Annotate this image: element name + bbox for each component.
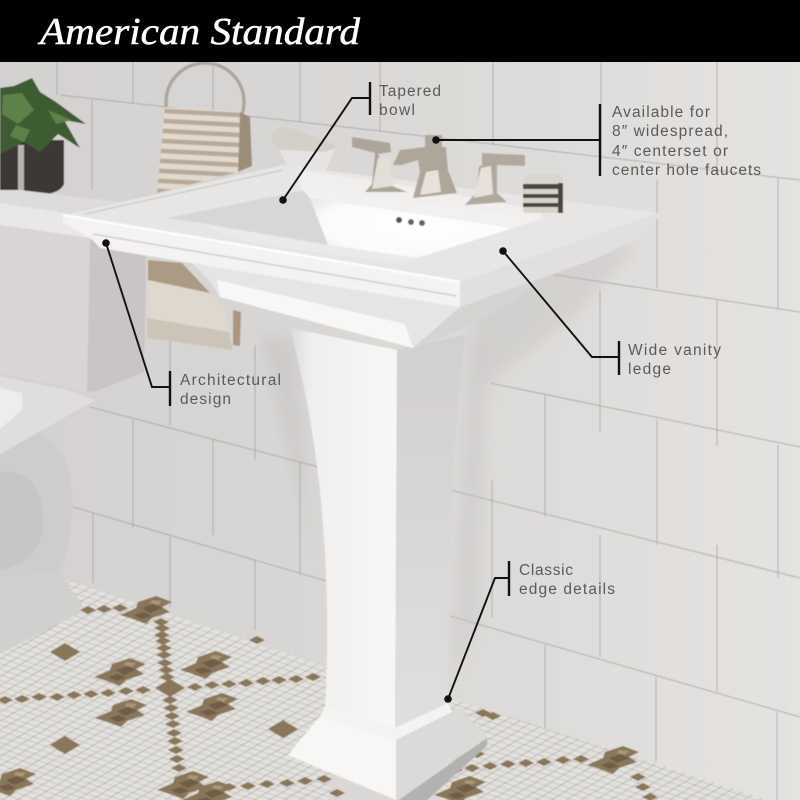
callout: faucet options: 8″ widespread, bbox=[612, 123, 728, 140]
icon: soap dish bbox=[270, 128, 336, 170]
header bar bbox=[0, 0, 800, 62]
wall shadow under sink bbox=[478, 249, 624, 374]
basin bbox=[167, 187, 543, 263]
callout: wide vanity ledge bbox=[499, 247, 721, 378]
callout: faucet options: 4″ centerset or bbox=[612, 143, 728, 160]
icon: faucet bbox=[352, 135, 525, 205]
pedestal base bbox=[288, 703, 487, 800]
callout: wide vanity ledge: ledge bbox=[628, 361, 671, 378]
sink top bbox=[63, 165, 658, 282]
callout: classic edge details: edge details bbox=[519, 581, 615, 598]
icon: potted plant bbox=[0, 78, 86, 196]
callout: faucet options: center hole faucets bbox=[612, 162, 761, 179]
icon: towel ring bbox=[164, 62, 246, 114]
toilet bowl bbox=[0, 430, 82, 656]
sink apron bbox=[185, 258, 460, 348]
callout: faucet options bbox=[432, 104, 761, 179]
icon: jar bbox=[523, 174, 563, 213]
callout: faucet options: Available for bbox=[612, 104, 710, 121]
floor mosaic bbox=[0, 580, 775, 800]
pedestal column bbox=[290, 328, 465, 730]
toilet tank bbox=[87, 238, 146, 392]
toilet bbox=[0, 202, 146, 656]
callout: classic edge details: Classic bbox=[519, 562, 573, 579]
lower towel bbox=[147, 260, 241, 350]
counter behind sink bbox=[0, 189, 114, 214]
sink fascia bbox=[63, 215, 460, 307]
callout: architectural design bbox=[102, 239, 281, 408]
logo: American Standard: American Standard bbox=[37, 11, 361, 53]
callout: architectural design: design bbox=[180, 391, 231, 408]
callout: tapered bowl: bowl bbox=[379, 102, 415, 119]
sink bbox=[63, 165, 658, 348]
callout: tapered bowl: Tapered bbox=[379, 83, 441, 100]
callout: classic edge details bbox=[444, 561, 615, 703]
callout: tapered bowl bbox=[279, 82, 441, 204]
icon: striped hand towel bbox=[157, 107, 252, 193]
callout: architectural design: Architectural bbox=[180, 372, 281, 389]
callout: wide vanity ledge: Wide vanity bbox=[628, 342, 721, 359]
